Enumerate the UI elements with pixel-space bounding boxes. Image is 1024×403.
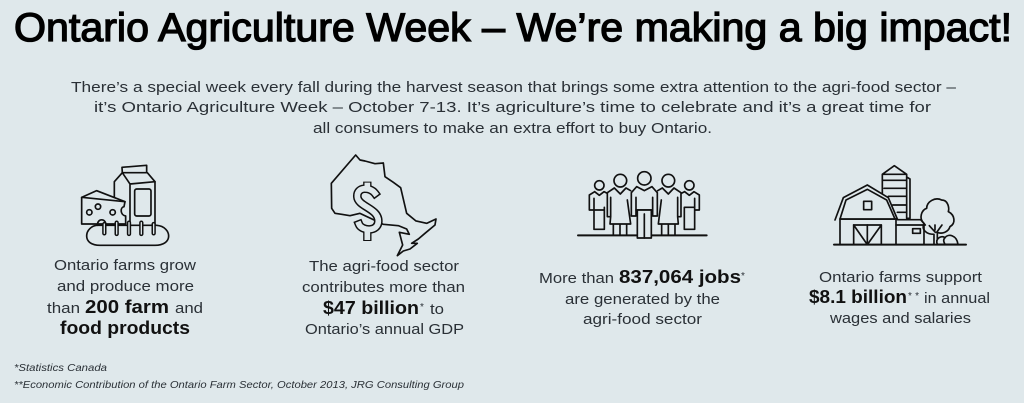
column 3 text <box>539 266 745 328</box>
column 3 text: agri-food sector <box>583 311 702 328</box>
column 2 text: Ontario’s annual GDP <box>305 321 464 338</box>
column 1 text: food products <box>60 317 190 338</box>
intro paragraph: it’s Ontario Agriculture Week – October 7-13. It’s agriculture’s time to celebrate and it’s a great time for <box>94 99 931 116</box>
column 4 text: ** <box>908 291 919 302</box>
column 3 text: are generated by the <box>565 291 720 308</box>
column 4 text: $8.1 billion <box>809 286 907 307</box>
column 2 text: to <box>430 301 444 318</box>
intro paragraph <box>71 79 957 137</box>
column 4 text: wages and salaries <box>829 310 971 327</box>
column 4 text: Ontario farms support <box>819 269 983 286</box>
column 1 text: and <box>175 300 203 317</box>
column 1 text: and produce more <box>57 278 194 295</box>
column 1 text: than <box>47 300 80 317</box>
column 1 text: 200 farm <box>85 296 169 317</box>
icon: group of people <box>578 172 707 238</box>
column 2 text <box>302 258 465 338</box>
column 4 text <box>809 269 990 327</box>
title: Ontario Agriculture Week – We’re making a big impact! <box>14 6 1012 50</box>
column 3 text: * <box>741 271 745 282</box>
footnotes: *Statistics Canada <box>14 362 107 374</box>
footnotes: **Economic Contribution of the Ontario Farm Sector, October 2013, JRG Consulting Group <box>14 379 464 391</box>
column 3 text: More than <box>539 270 614 287</box>
icon: cheese, milk carton and bread <box>82 165 169 245</box>
column 2 text: * <box>420 302 424 313</box>
icon: barn, silo and tree <box>834 166 966 245</box>
column 4 text: in annual <box>924 290 990 307</box>
column 3 text: 837,064 jobs <box>619 266 741 287</box>
icon: Ontario map with dollar sign <box>331 155 436 256</box>
column 2 text: contributes more than <box>302 279 465 296</box>
column 1 text <box>47 257 203 338</box>
column 2 text: $47 billion <box>323 297 419 318</box>
column 2 text: The agri-food sector <box>309 258 459 275</box>
intro paragraph: all consumers to make an extra effort to buy Ontario. <box>313 120 712 137</box>
column 1 text: Ontario farms grow <box>54 257 196 274</box>
footnotes <box>14 362 464 391</box>
intro paragraph: There’s a special week every fall during the harvest season that brings some extra attention to the agri-food sector – <box>71 79 957 96</box>
